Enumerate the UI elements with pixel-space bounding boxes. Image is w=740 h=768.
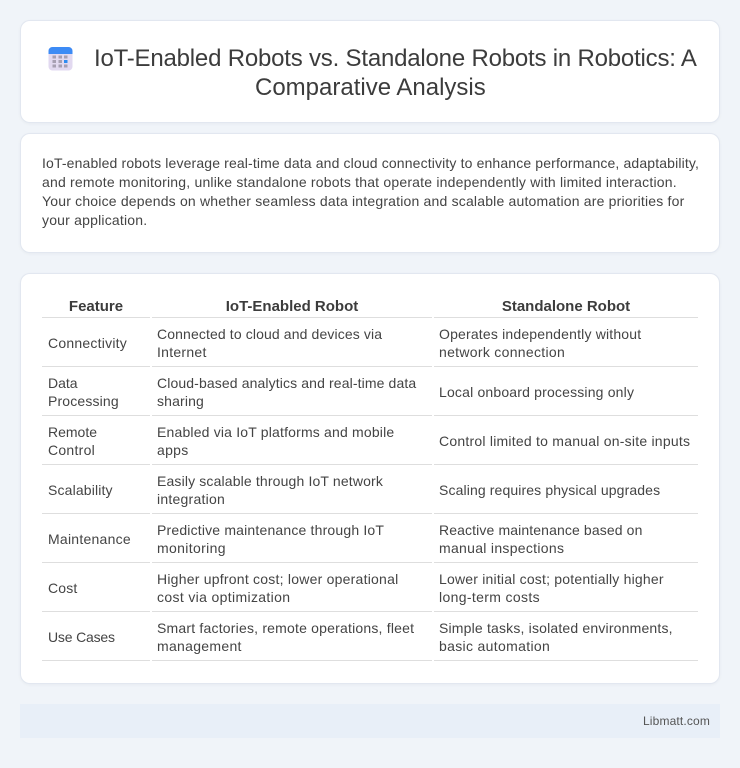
row: Scalability: Scalability bbox=[48, 482, 113, 498]
row: Cost: long-term costs bbox=[439, 589, 540, 605]
table header: Standalone Robot bbox=[502, 298, 630, 315]
row: Scalability: Scaling requires physical upgrades bbox=[439, 482, 660, 498]
row: Connectivity: Connected to cloud and devices via bbox=[157, 326, 382, 342]
footer bar bbox=[20, 704, 720, 738]
row: Connectivity bbox=[42, 326, 698, 367]
table header: IoT-Enabled Robot bbox=[226, 298, 358, 315]
panel: comparison table bbox=[20, 273, 720, 684]
row: Remote Control: Control bbox=[48, 442, 95, 458]
row: Use Cases: Use Cases bbox=[48, 629, 115, 645]
row: Data Processing: Local onboard processing only bbox=[439, 384, 634, 400]
row: Use Cases: basic automation bbox=[439, 638, 550, 654]
row: Maintenance: Reactive maintenance based on bbox=[439, 522, 642, 538]
row: Maintenance: Predictive maintenance through IoT bbox=[157, 522, 384, 538]
row: Remote Control: apps bbox=[157, 442, 189, 458]
row: Maintenance: Maintenance bbox=[48, 531, 131, 547]
row: Cost: Cost bbox=[48, 580, 77, 596]
row: Use Cases: Smart factories, remote operations, fleet bbox=[157, 620, 414, 636]
row: Data Processing: sharing bbox=[157, 393, 204, 409]
row: Maintenance: monitoring bbox=[157, 540, 226, 556]
panel: title header bbox=[20, 20, 720, 123]
row: Use Cases: management bbox=[157, 638, 242, 654]
row: Data Processing: Data bbox=[48, 375, 78, 391]
row: Data Processing: Processing bbox=[48, 393, 119, 409]
intro paragraph bbox=[42, 155, 699, 228]
row: Use Cases bbox=[42, 620, 698, 661]
icon: calendar grid bbox=[48, 47, 72, 70]
panel: intro text bbox=[20, 133, 720, 253]
row: Connectivity: Internet bbox=[157, 344, 207, 360]
row: Scalability: integration bbox=[157, 491, 225, 507]
row: Maintenance bbox=[42, 522, 698, 563]
intro paragraph: Your choice depends on whether seamless data integration and scalable automation are priorities for bbox=[42, 193, 684, 209]
row: Scalability: Easily scalable through IoT network bbox=[157, 473, 383, 489]
row: Remote Control: Remote bbox=[48, 424, 97, 440]
title bbox=[94, 45, 697, 101]
row: Cost: cost via optimization bbox=[157, 589, 290, 605]
intro paragraph: IoT-enabled robots leverage real-time data and cloud connectivity to enhance performance, adaptability, bbox=[42, 155, 699, 171]
intro paragraph: your application. bbox=[42, 212, 147, 228]
row: Connectivity: Operates independently without bbox=[439, 326, 641, 342]
row: Scalability bbox=[42, 473, 698, 514]
row: Maintenance: manual inspections bbox=[439, 540, 564, 556]
row: Data Processing bbox=[42, 375, 698, 416]
intro paragraph: and remote monitoring, unlike standalone robots that operate independently with limited interaction. bbox=[42, 174, 677, 190]
table header bbox=[42, 298, 698, 318]
row: Use Cases: Simple tasks, isolated environments, bbox=[439, 620, 673, 636]
row: Connectivity: network connection bbox=[439, 344, 565, 360]
title: Comparative Analysis bbox=[255, 74, 486, 101]
row: Connectivity: Connectivity bbox=[48, 335, 127, 351]
row: Data Processing: Cloud-based analytics and real-time data bbox=[157, 375, 416, 391]
row: Cost: Higher upfront cost; lower operational bbox=[157, 571, 398, 587]
row: Remote Control bbox=[42, 424, 698, 465]
footer credit: Libmatt.com bbox=[643, 714, 710, 728]
row: Cost: Lower initial cost; potentially higher bbox=[439, 571, 664, 587]
row: Cost bbox=[42, 571, 698, 612]
table header: Feature bbox=[69, 298, 123, 315]
row: Remote Control: Enabled via IoT platforms and mobile bbox=[157, 424, 394, 440]
title: IoT-Enabled Robots vs. Standalone Robots in Robotics: A bbox=[94, 45, 697, 72]
row: Remote Control: Control limited to manual on-site inputs bbox=[439, 433, 690, 449]
